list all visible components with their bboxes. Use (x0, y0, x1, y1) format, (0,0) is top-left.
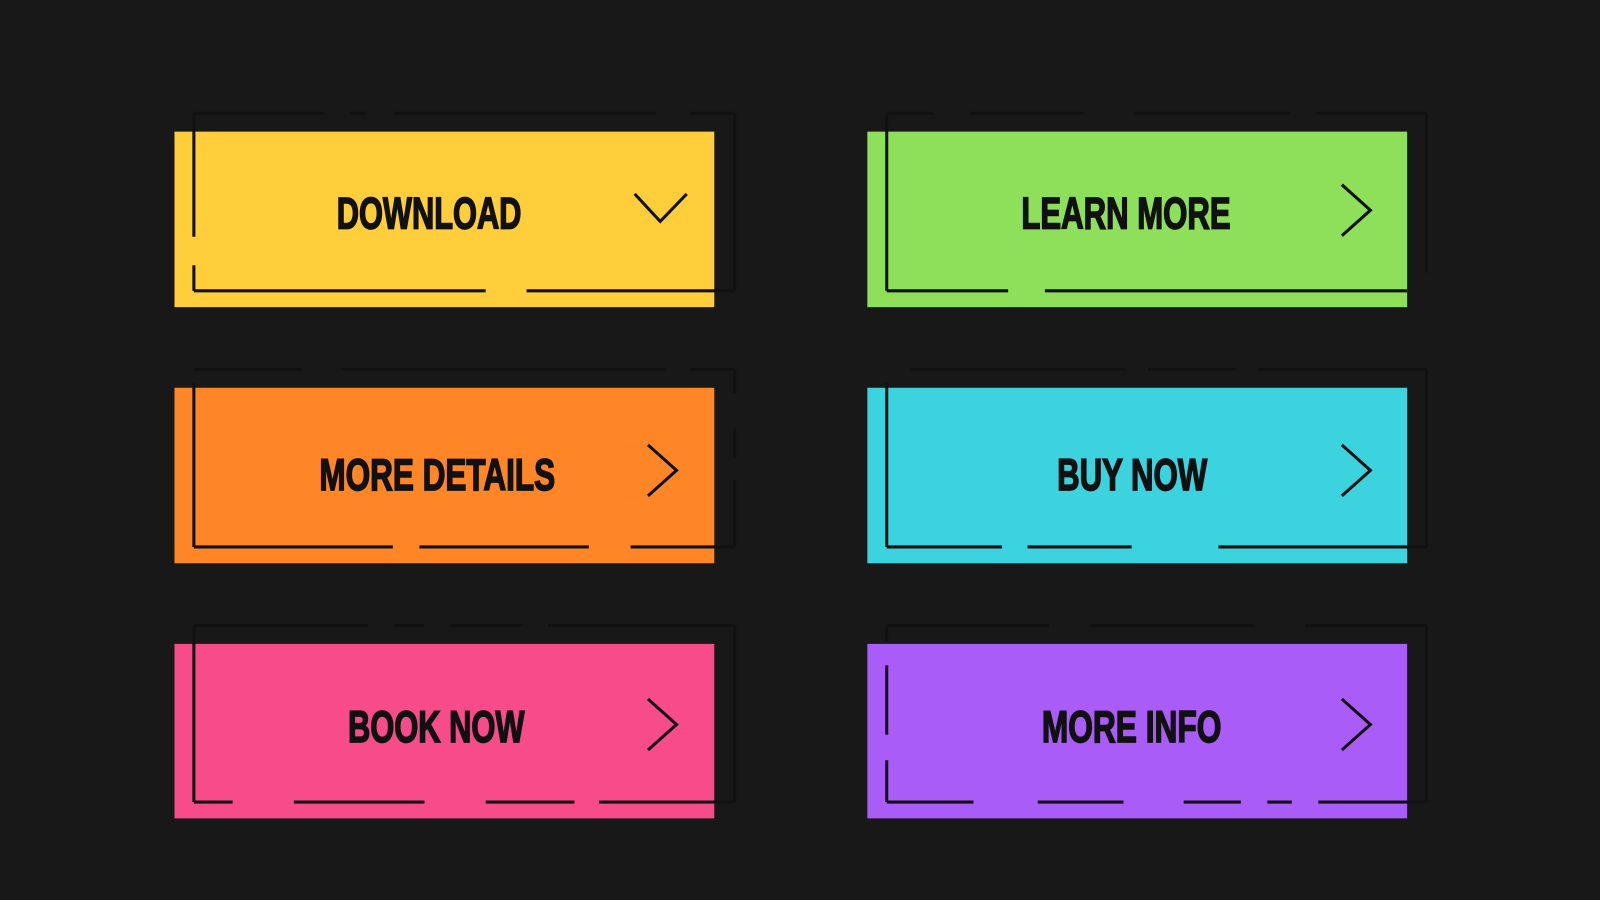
button: more info (867, 626, 1427, 818)
icon: right chevron (1342, 699, 1370, 750)
label: book now: BOOK NOW (348, 701, 525, 752)
button: book now (174, 626, 735, 818)
label: more details: MORE DETAILS (319, 449, 555, 500)
icon: right chevron (648, 445, 677, 496)
label: download: DOWNLOAD (337, 188, 521, 239)
label: learn more: LEARN MORE (1021, 188, 1231, 239)
icon: right chevron (1342, 445, 1370, 496)
icon: right chevron (648, 699, 677, 750)
button: download (174, 113, 735, 307)
button: learn more (867, 113, 1427, 307)
icon: right chevron (1342, 185, 1370, 236)
icon: down chevron (635, 194, 687, 221)
button: more details (174, 369, 735, 563)
label: more info: MORE INFO (1042, 701, 1221, 752)
button: buy now (867, 369, 1427, 563)
label: buy now: BUY NOW (1057, 449, 1208, 500)
